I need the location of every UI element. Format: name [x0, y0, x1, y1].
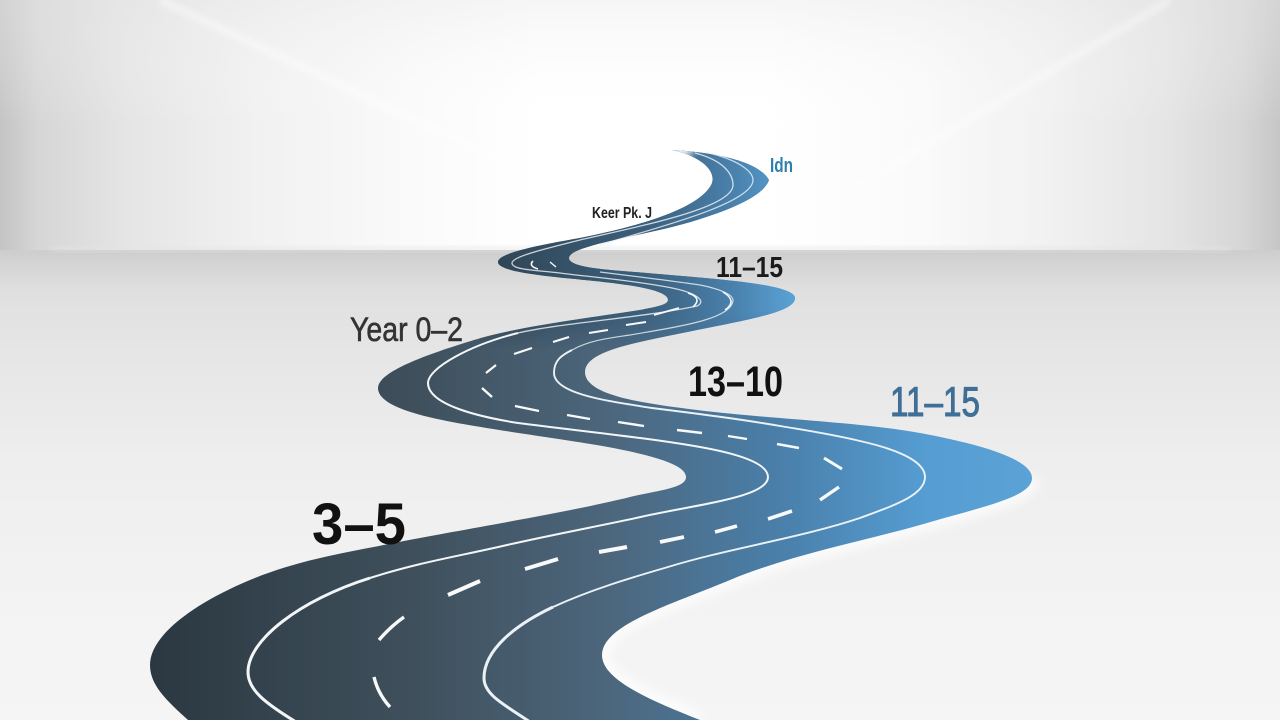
- left lane line: [248, 153, 768, 720]
- label: Year 0–2: Year 0–2: [350, 311, 463, 349]
- label: 11–15 upper: 11–15: [716, 252, 783, 284]
- label: 13–10: 13–10: [688, 358, 783, 406]
- label: 11–15 blue: 11–15: [890, 378, 980, 425]
- winding road: [140, 140, 1040, 720]
- label: 3–5: 3–5: [312, 492, 406, 557]
- label: far tiny text: Idn: [770, 155, 793, 177]
- road halo: [602, 478, 1032, 720]
- road surface: [140, 140, 1040, 720]
- center dashes: [374, 261, 842, 707]
- label: Year P..: Keer Pk. J: [592, 205, 652, 222]
- right lane line: [484, 152, 925, 720]
